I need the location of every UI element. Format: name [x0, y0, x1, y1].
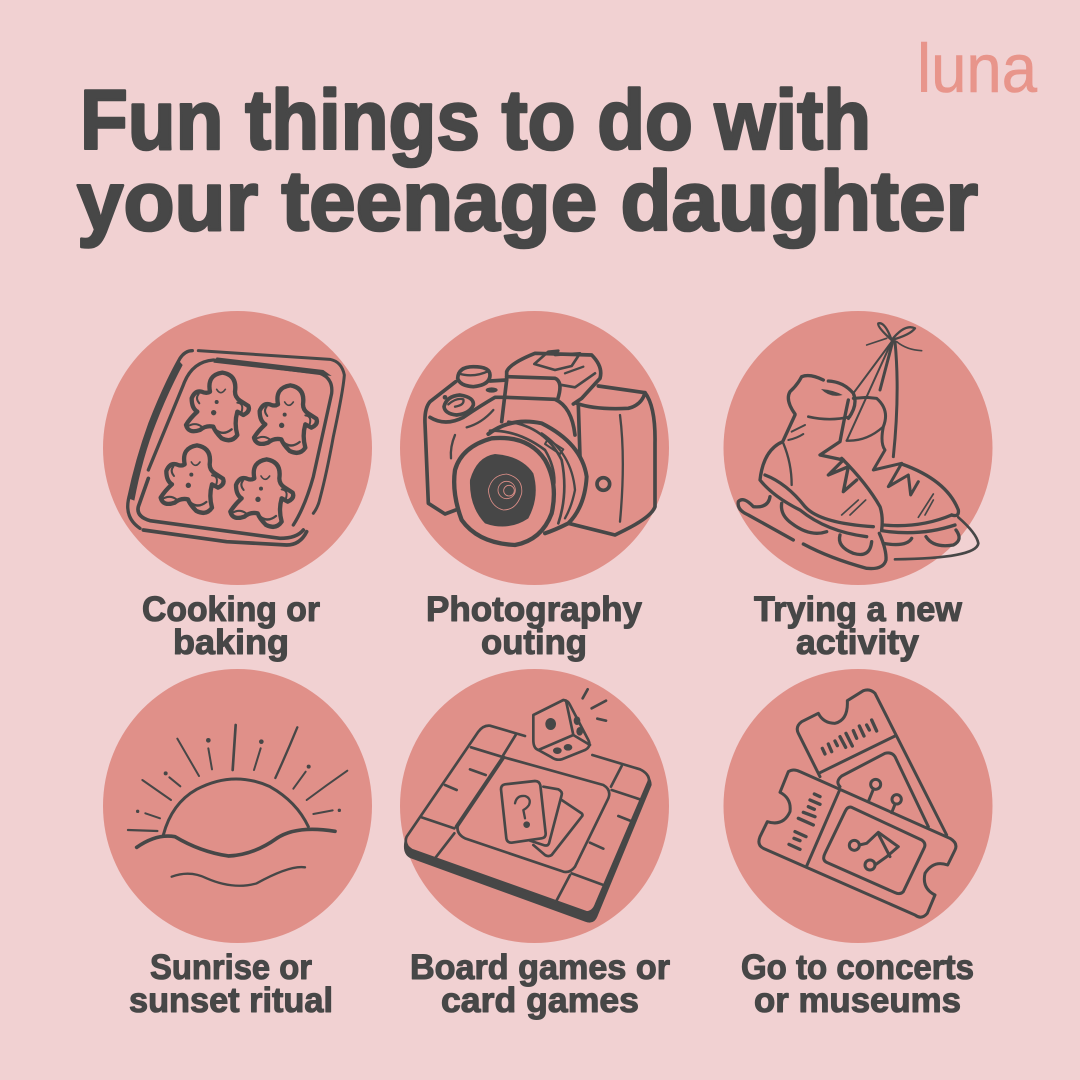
label: cooking or baking — [142, 590, 320, 662]
label: board games or card games — [410, 948, 670, 1020]
panel: sunrise or sunset ritual — [103, 669, 372, 1020]
circle: concerts — [724, 669, 992, 943]
label: trying a new activity: activity — [796, 623, 920, 662]
label: board games or card games: card games — [441, 981, 639, 1020]
label: trying a new activity: Trying a new — [754, 590, 963, 629]
label: board games or card games: Board games or — [410, 948, 670, 987]
label: sunrise or sunset ritual: sunset ritual — [129, 981, 333, 1020]
icon: board game, cards and die — [404, 689, 652, 923]
icon: camera — [425, 351, 655, 545]
title — [77, 73, 978, 248]
label: photography outing: Photography — [426, 590, 643, 629]
title: Fun things to do with — [80, 73, 871, 167]
label: photography outing — [426, 590, 643, 662]
label: cooking or baking: Cooking or — [142, 590, 320, 629]
label: sunrise or sunset ritual: Sunrise or — [150, 948, 312, 987]
logo: luna: luna — [917, 30, 1038, 107]
label: go to concerts or museums: or museums — [754, 981, 961, 1020]
panel: board games or card games — [400, 669, 670, 1020]
title: your teenage daughter — [77, 154, 978, 248]
panel: photography outing — [400, 311, 669, 662]
circle: board games — [400, 669, 669, 943]
icon: concert tickets — [759, 690, 956, 917]
label: sunrise or sunset ritual — [129, 948, 333, 1020]
cookie 2 — [254, 385, 317, 453]
icon: ice skates — [738, 323, 978, 569]
label: trying a new activity — [754, 590, 963, 662]
panel: trying a new activity — [724, 311, 992, 662]
panel: cooking or baking — [103, 311, 372, 662]
label: go to concerts or museums: Go to concerts — [741, 948, 974, 987]
label: cooking or baking: baking — [173, 623, 289, 662]
circle: activity — [724, 311, 992, 585]
cookie 3 — [161, 445, 224, 513]
panel: go to concerts or museums — [724, 669, 992, 1020]
icon: baking tray with gingerbread cookies — [128, 351, 344, 545]
cookie 1 — [186, 373, 249, 440]
label: go to concerts or museums — [741, 948, 974, 1020]
icon: sunrise over waves — [128, 725, 347, 886]
cookie 4 — [230, 459, 293, 527]
circle: photography — [400, 311, 669, 585]
circle: cooking — [103, 311, 372, 585]
circle: sunrise — [103, 669, 372, 943]
label: photography outing: outing — [481, 623, 587, 662]
